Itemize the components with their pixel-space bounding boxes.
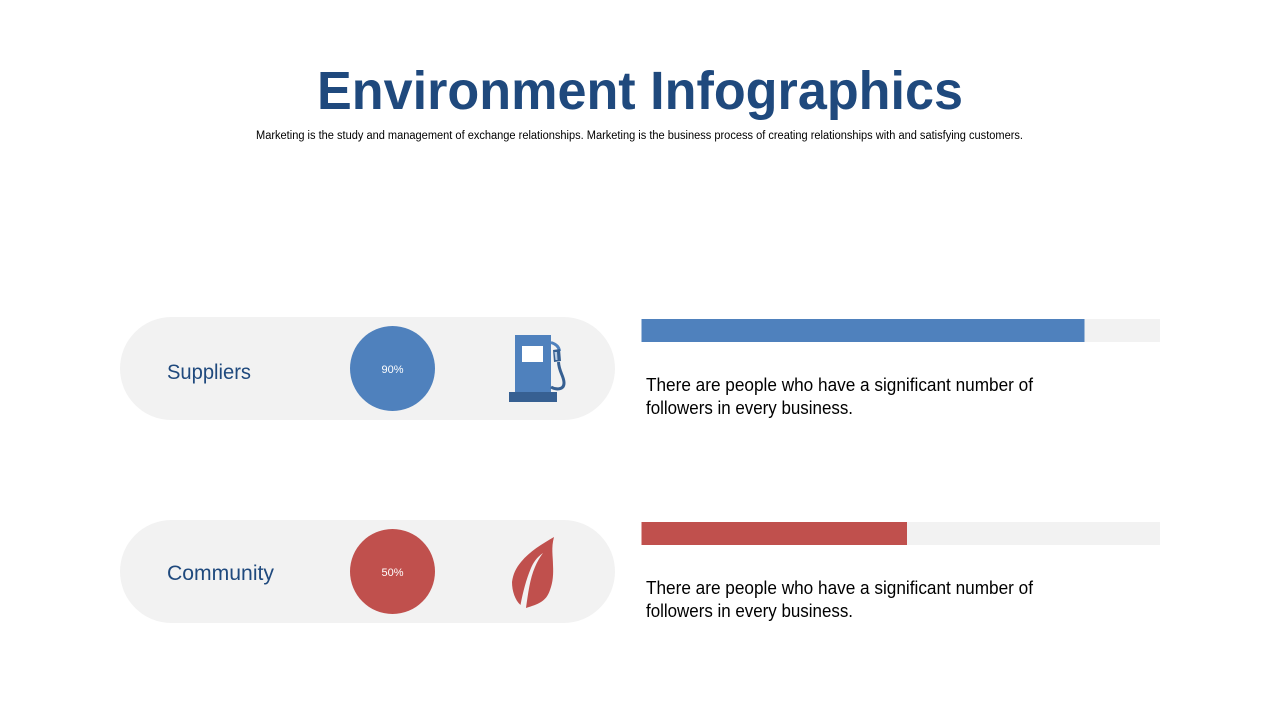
suppliers percentage circle xyxy=(350,326,435,411)
community pill background xyxy=(120,520,615,623)
community label: Community xyxy=(167,562,274,585)
community description: followers in every business. xyxy=(646,601,853,621)
community bar fill xyxy=(642,522,907,545)
title: Environment Infographics xyxy=(317,61,963,121)
community percentage circle: 50% xyxy=(381,567,404,579)
panel: suppliers progress xyxy=(642,319,1160,418)
suppliers description: There are people who have a significant number of xyxy=(646,375,1034,395)
suppliers pill background xyxy=(120,317,615,420)
panel: community xyxy=(120,520,615,623)
community percentage circle xyxy=(350,529,435,614)
subtitle: Marketing is the study and management of exchange relationships. Marketing is the business process of creating relationships with and satisfying customers. xyxy=(256,130,1023,142)
panel: community progress xyxy=(642,522,1160,621)
suppliers description: followers in every business. xyxy=(646,398,853,418)
icon: leaf xyxy=(512,537,554,608)
suppliers label: Suppliers xyxy=(167,361,251,384)
suppliers bar fill xyxy=(642,319,1084,342)
suppliers percentage circle: 90% xyxy=(381,364,404,376)
community bar track xyxy=(642,522,1160,545)
panel: suppliers xyxy=(120,317,615,420)
suppliers bar track xyxy=(642,319,1160,342)
icon: fuel pump xyxy=(509,335,564,402)
community description: There are people who have a significant number of xyxy=(646,578,1034,598)
